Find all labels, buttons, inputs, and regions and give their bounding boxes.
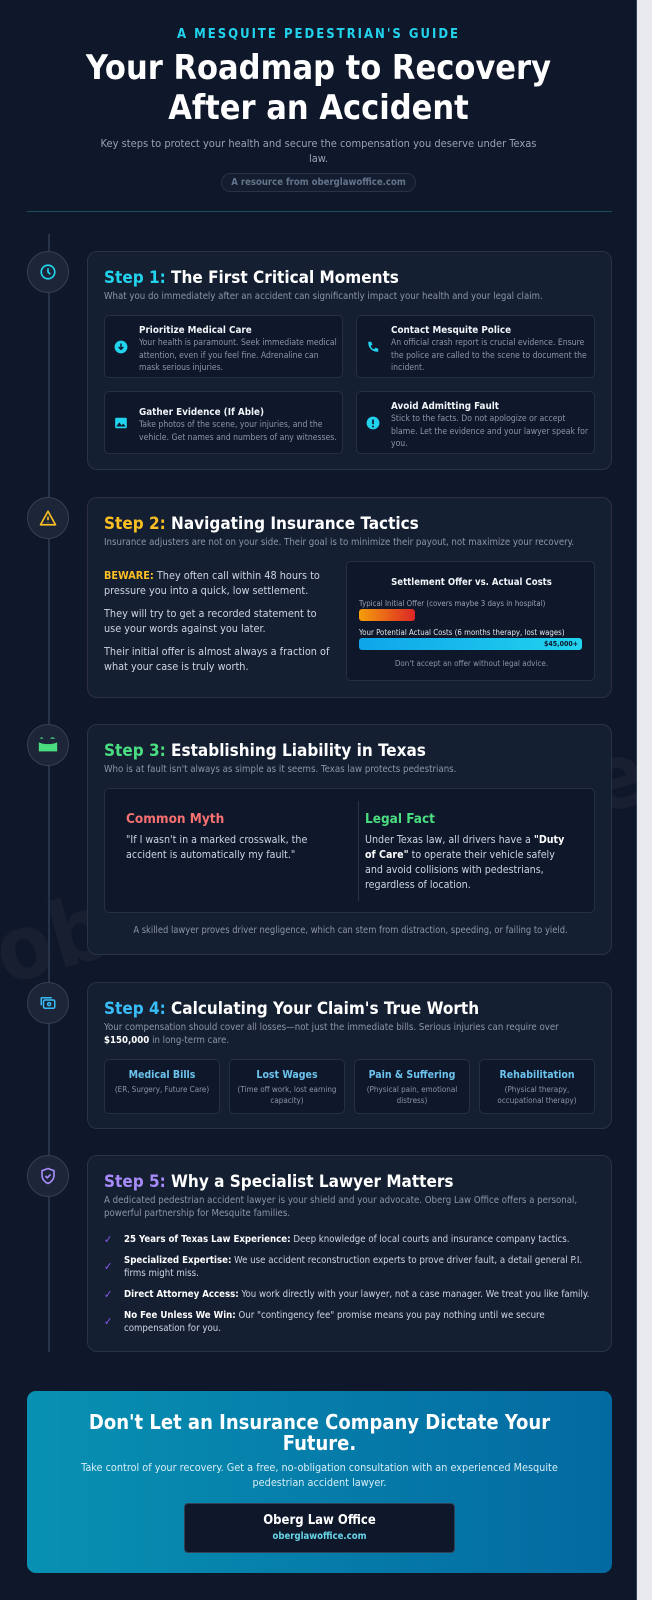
panel: step 5: No Fee Unless We Win: Our "contingency fee" promise means you pay nothing until we secure compensation for you. <box>124 1310 545 1334</box>
categories: (ER, Surgery, Future Care) <box>115 1085 209 1094</box>
categories: (Physical therapy, <box>505 1085 569 1094</box>
callout: CTA <box>27 1391 612 1573</box>
panel: step 5 <box>87 1155 612 1352</box>
icon: step4 money <box>27 982 69 1024</box>
bar chart: Your Potential Actual Costs (6 months therapy, lost wages) <box>359 628 565 637</box>
bar chart: $45,000+ <box>544 640 578 648</box>
categories: Lost Wages <box>256 1069 318 1081</box>
myth: Common Myth <box>126 811 224 827</box>
myth vs fact <box>104 788 595 913</box>
callout: CTA: Take control of your recovery. Get a free, no-obligation consultation with an experienced Mesquite pedestrian accident lawyer. <box>81 1461 558 1489</box>
categories <box>104 1059 595 1114</box>
box: police: Contact Mesquite Police <box>391 325 511 336</box>
source pill <box>221 173 416 192</box>
panel: step 1: What you do immediately after an accident can significantly impact your health and your legal claim. <box>104 291 543 302</box>
warning text: Their initial offer is almost always a fraction of what your case is truly worth. <box>104 645 329 673</box>
fact: Under Texas law, all drivers have a "Duty of Care" to operate their vehicle safely and avoid collisions with pedestrians, regardless of location. <box>365 834 564 891</box>
checklist: 25 Years of Texas Law Experience: Deep knowledge of local courts and insurance company tactics. <box>124 1234 570 1245</box>
box: fault: Stick to the facts. Do not apologize or accept blame. Let the evidence and your lawyer speak for you. <box>391 414 588 449</box>
step4 heading: Step 4: Calculating Your Claim's True Worth <box>104 999 479 1019</box>
categories: Rehabilitation <box>499 1069 575 1081</box>
kicker: A MESQUITE PEDESTRIAN'S GUIDE <box>177 27 460 42</box>
warning text: They will try to get a recorded statement to use your words against you later. <box>104 607 317 635</box>
panel: step 5: ✓ <box>104 1260 112 1273</box>
panel: step 3: Who is at fault isn't always as simple as it seems. Texas law protects pedestrians. <box>104 764 456 775</box>
icon: step2 warning <box>27 497 69 539</box>
callout: CTA: Don't Let an Insurance Company Dictate Your Future. <box>89 1410 550 1455</box>
panel: step 5: Specialized Expertise: We use accident reconstruction experts to prove driver fault, a detail general P.I. firms might miss. <box>124 1255 582 1279</box>
bar chart <box>346 561 595 681</box>
contact button: oberglawoffice.com <box>272 1531 367 1542</box>
panel: step 3 <box>87 724 612 955</box>
categories: Medical Bills <box>129 1069 195 1081</box>
step1 heading: Step 1: The First Critical Moments <box>104 268 399 288</box>
box: evidence <box>104 391 343 454</box>
box: evidence: Take photos of the scene, your injuries, and the vehicle. Get names and numbers of any witnesses. <box>139 420 337 442</box>
categories: Pain & Suffering <box>369 1069 455 1081</box>
icon: step3 scales <box>27 724 69 766</box>
categories: (Time off work, lost earning capacity) <box>238 1085 336 1105</box>
panel: step 2: Insurance adjusters are not on your side. Their goal is to minimize their payout, not maximize your recovery. <box>104 537 574 548</box>
icon: step5 shield <box>27 1155 69 1197</box>
bar chart: Don't accept an offer without legal advice. <box>395 659 548 668</box>
box: medical: Your health is paramount. Seek immediate medical attention, even if you feel fine. Adrenaline can mask serious injuries. <box>139 338 337 373</box>
intro text: Key steps to protect your health and secure the compensation you deserve under Texas law. <box>101 137 536 165</box>
panel: step 4: Your compensation should cover all losses—not just the immediate bills. Serious injuries can require over $150,000 in long-term care. <box>104 1022 559 1046</box>
panel: step 5: ✓ <box>104 1288 112 1301</box>
panel: step 3: A skilled lawyer proves driver negligence, which can stem from distraction, speeding, or failing to yield. <box>133 925 568 936</box>
box: fault: Avoid Admitting Fault <box>391 401 499 412</box>
myth <box>126 811 307 861</box>
panel: step 5: A dedicated pedestrian accident lawyer is your shield and your advocate. Oberg Law Office offers a personal, powerful partnership for Mesquite families. <box>104 1195 577 1219</box>
warning text: BEWARE: They often call within 48 hours to pressure you into a quick, low settlement. <box>104 569 320 597</box>
box: police: An official crash report is crucial evidence. Ensure the police are called to the scene to document the incident. <box>391 338 587 373</box>
contact button <box>184 1503 455 1553</box>
panel: step 5: ✓ <box>104 1315 112 1328</box>
warning text <box>104 569 330 673</box>
categories: (Physical pain, emotional distress) <box>367 1085 457 1105</box>
box: medical: Prioritize Medical Care <box>139 325 252 336</box>
step2 heading: Step 2: Navigating Insurance Tactics <box>104 514 419 534</box>
contact button: Oberg Law Office <box>263 1513 376 1528</box>
icon: step1 clock <box>27 251 69 293</box>
box: police <box>356 315 595 378</box>
timeline line <box>48 234 50 1352</box>
panel: step 2 <box>87 497 612 698</box>
title: After an Accident <box>168 88 469 128</box>
fact: Legal Fact <box>365 811 435 827</box>
source pill: A resource from oberglawoffice.com <box>231 177 406 188</box>
header <box>86 27 551 192</box>
title <box>86 48 551 128</box>
box: evidence: Gather Evidence (If Able) <box>139 407 264 418</box>
box: medical <box>104 315 343 378</box>
bar chart: Settlement Offer vs. Actual Costs <box>391 577 552 588</box>
step3 heading: Step 3: Establishing Liability in Texas <box>104 741 426 761</box>
categories: occupational therapy) <box>497 1096 577 1105</box>
panel: step 1 <box>87 251 612 470</box>
myth: "If I wasn't in a marked crosswalk, the accident is automatically my fault." <box>126 834 307 861</box>
step5 heading: Step 5: Why a Specialist Lawyer Matters <box>104 1172 454 1192</box>
bar chart: Typical Initial Offer (covers maybe 3 days in hospital) <box>359 599 545 608</box>
panel: step 5: Direct Attorney Access: You work directly with your lawyer, not a case manager. We treat you like family. <box>124 1289 589 1300</box>
panel: step 4 <box>87 982 612 1129</box>
title: Your Roadmap to Recovery <box>86 48 551 88</box>
box: fault <box>356 391 595 454</box>
checklist: ✓ <box>104 1233 112 1246</box>
